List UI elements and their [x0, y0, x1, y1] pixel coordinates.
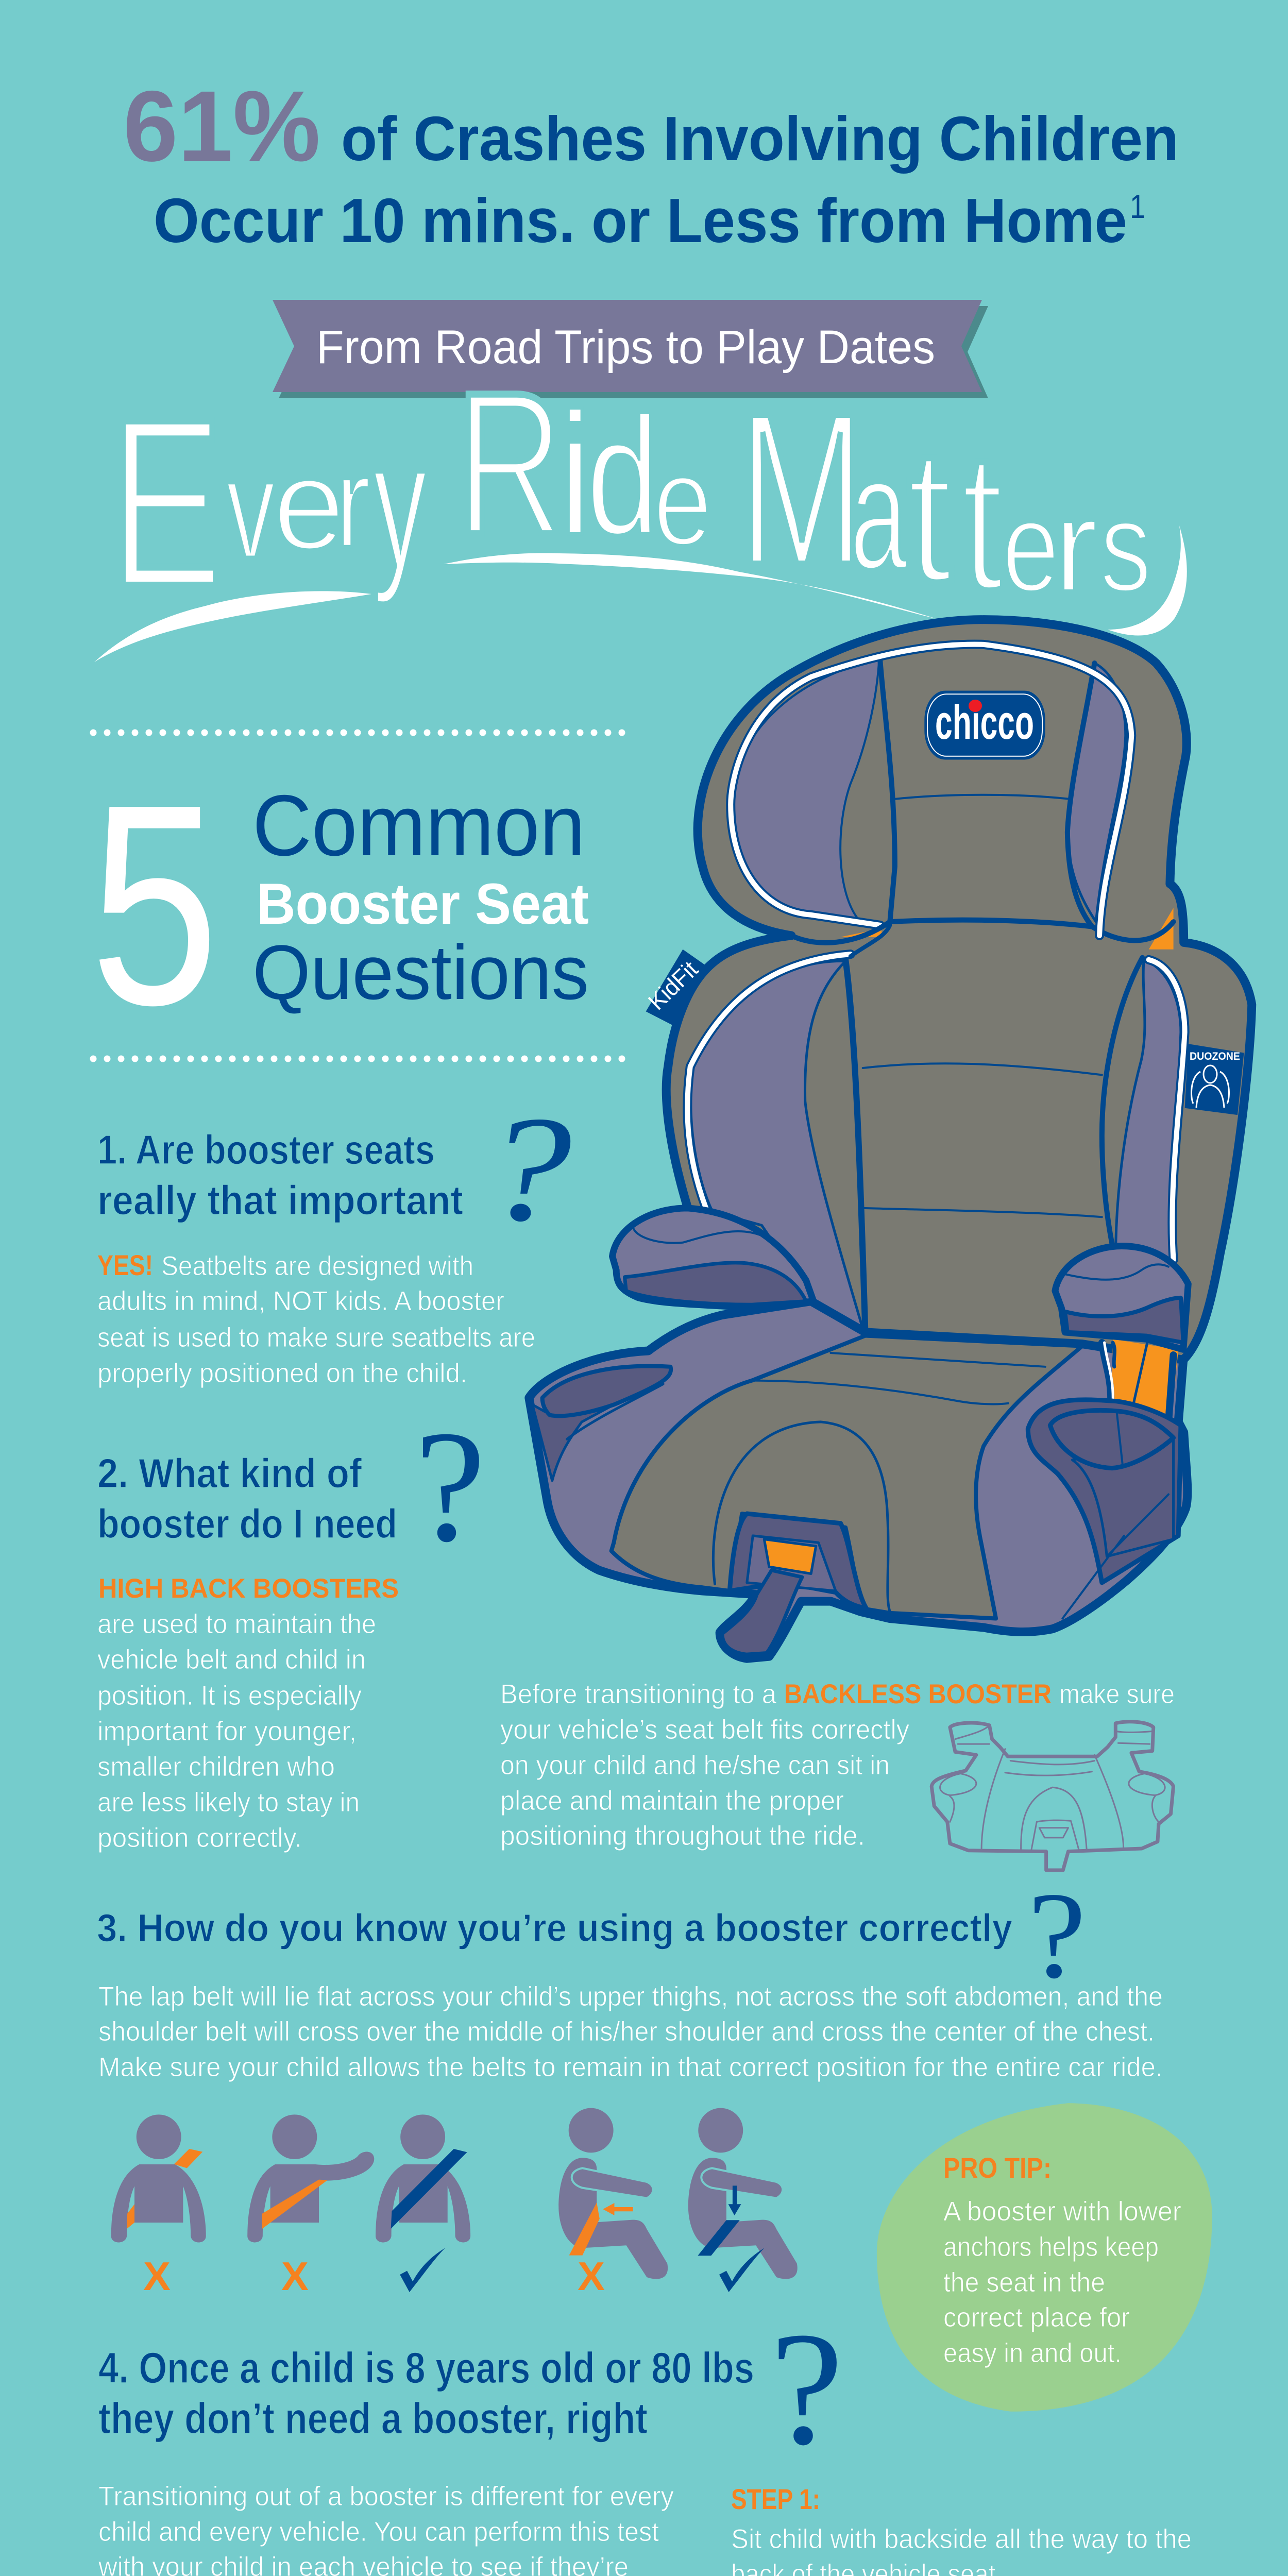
script title: Every Ride Matters: e — [273, 432, 345, 576]
icon: correct shoulder belt figure — [376, 2114, 470, 2292]
high back boosters text: are less likely to stay in — [97, 1787, 360, 1818]
question 4 heading: 4. Once a child is 8 years old or 80 lbs — [98, 2344, 754, 2392]
question 2 heading: booster do I need — [97, 1501, 397, 1547]
panel: pro tip lower anchors: PRO TIP: — [943, 2151, 1052, 2184]
question 4 heading: they don’t need a booster, right — [98, 2394, 648, 2443]
backless booster text: Before transitioning to a — [500, 1679, 776, 1709]
ribbon banner: From Road Trips to Play Dates — [316, 321, 935, 374]
question 1 answer — [97, 1249, 535, 1388]
backless booster text: make sure — [1059, 1679, 1175, 1709]
question 4 body — [98, 2481, 674, 2576]
question 1 heading — [97, 1127, 463, 1223]
title: 61% of crashes: 1 — [1130, 188, 1145, 225]
script title: Every Ride Matters: R — [456, 351, 564, 577]
swoosh under script title — [94, 526, 1187, 662]
panel: pro tip lower anchors — [877, 2103, 1212, 2412]
panel: pro tip lower anchors: A booster with lower — [943, 2196, 1181, 2227]
script title: Every Ride Matters: v — [226, 430, 275, 588]
icon: wrong shoulder belt figure — [111, 2114, 206, 2242]
mark: wrong: X — [281, 2253, 309, 2299]
question 1 answer: seat is used to make sure seatbelts are — [97, 1323, 535, 1353]
icon: backless booster outline — [931, 1722, 1174, 1870]
script title: Every Ride Matters: t — [907, 409, 953, 622]
icon: wrong lap belt side figure — [558, 2108, 668, 2279]
script title: Every Ride Matters: M — [738, 367, 865, 611]
backless booster text: positioning throughout the ride. — [500, 1821, 865, 1851]
script title: Every Ride Matters: d — [586, 382, 659, 569]
heading: 5 common booster seat questions: Questions — [252, 929, 589, 1015]
high back boosters text — [97, 1573, 399, 1853]
script title: Every Ride Matters: r — [1054, 472, 1098, 619]
question 3 body: shoulder belt will cross over the middle of his/her shoulder and cross the center of the chest. — [98, 2016, 1155, 2047]
backless booster text: your vehicle’s seat belt fits correctly — [500, 1715, 909, 1745]
illustration: booster seat — [529, 620, 1252, 1658]
high back boosters text: smaller children who — [97, 1752, 335, 1782]
script title: Every Ride Matters: s — [1100, 474, 1151, 618]
ribbon banner — [273, 300, 988, 398]
backless booster text: BACKLESS BOOSTER — [784, 1679, 1052, 1709]
backless booster text: place and maintain the proper — [500, 1786, 844, 1816]
mark: wrong: X — [143, 2253, 171, 2299]
DuoZone tag — [1190, 1050, 1240, 1108]
belt position icons — [111, 2108, 798, 2299]
question 2 heading: 2. What kind of — [97, 1450, 362, 1496]
dotted divider top — [93, 730, 626, 736]
panel: pro tip lower anchors: the seat in the — [943, 2267, 1105, 2298]
dotted divider — [93, 1055, 626, 1062]
question 1 answer: properly positioned on the child. — [97, 1358, 467, 1388]
question 3 body: Make sure your child allows the belts to remain in that correct position for the entire car ride. — [98, 2052, 1163, 2082]
question 4 heading — [98, 2344, 754, 2443]
question 3 heading: 3. How do you know you’re using a booster correctly — [97, 1906, 1012, 1950]
script title: Every Ride Matters: E — [109, 370, 223, 636]
logo dot — [969, 700, 982, 712]
question 1 answer: adults in mind, NOT kids. A booster — [97, 1286, 504, 1316]
mark: wrong: X — [578, 2253, 605, 2299]
panel: pro tip lower anchors: easy in and out. — [943, 2338, 1122, 2368]
question 1 heading: 1. Are booster seats — [97, 1127, 435, 1173]
step 1: Sit child with backside all the way to the — [731, 2524, 1192, 2554]
title: 61% of crashes: 61% — [123, 70, 320, 182]
icon: correct lap belt side figure — [688, 2108, 798, 2292]
heading: 5 common booster seat questions: Common — [252, 777, 585, 874]
script title: Every Ride Matters: r — [335, 430, 371, 574]
high back boosters text: important for younger, — [97, 1716, 357, 1747]
high back boosters text: vehicle belt and child in — [97, 1645, 366, 1675]
question 4 body: child and every vehicle. You can perform this test — [98, 2517, 659, 2547]
KidFit tag: KidFit — [643, 956, 703, 1015]
heading: 5 common booster seat questions: Booster Seat — [257, 872, 589, 936]
title: 61% of crashes: Occur 10 mins. or Less from Home — [154, 185, 1127, 256]
icon: question mark: ? — [770, 2298, 843, 2478]
icon: belt under arm figure — [247, 2114, 374, 2242]
script title: Every Ride Matters: a — [850, 425, 908, 603]
seat brand logo text: chicco — [935, 695, 1034, 749]
heading: 5 common booster seat questions — [90, 745, 589, 1064]
panel: pro tip lower anchors: correct place for — [943, 2302, 1130, 2333]
title: 61% of crashes — [123, 70, 1179, 256]
question 4 — [68, 2298, 1224, 2576]
question 1 — [97, 1085, 572, 1388]
question 2 — [97, 1398, 1175, 1870]
question 3 — [97, 1867, 1212, 2412]
script title: Every Ride Matters — [109, 351, 1151, 636]
question 3 body — [98, 1981, 1163, 2082]
high back boosters text: position. It is especially — [97, 1681, 362, 1711]
backless booster text — [500, 1679, 1175, 1851]
backless booster text: on your child and he/she can sit in — [500, 1750, 890, 1781]
script title: Every Ride Matters: e — [653, 431, 712, 571]
question 3 body: The lap belt will lie flat across your child’s upper thighs, not across the soft abdomen, and the — [98, 1981, 1163, 2012]
icon: question mark: ? — [484, 1085, 572, 1252]
question 4 body: Transitioning out of a booster is different for every — [98, 2481, 674, 2512]
icon: question mark: ? — [1028, 1867, 1086, 2004]
panel: pro tip lower anchors: anchors helps keep — [943, 2232, 1159, 2262]
high back boosters text: are used to maintain the — [97, 1609, 376, 1639]
script title: Every Ride Matters: i — [558, 377, 592, 571]
icon: question mark: ? — [415, 1398, 486, 1575]
step 1 — [731, 2483, 1192, 2576]
script title: Every Ride Matters: y — [374, 405, 427, 605]
question 2 heading — [97, 1450, 397, 1547]
script title: Every Ride Matters: e — [1002, 474, 1059, 618]
title: 61% of crashes: of Crashes Involving Children — [341, 104, 1179, 174]
script title: Every Ride Matters: t — [961, 411, 1004, 631]
question 1 answer: Seatbelts are designed with — [161, 1251, 473, 1281]
question 1 heading: really that important — [97, 1177, 463, 1223]
question 1 answer: YES! — [97, 1249, 153, 1281]
step 1: STEP 1: — [731, 2483, 820, 2515]
DuoZone tag: DUOZONE — [1190, 1050, 1240, 1062]
heading: 5 common booster seat questions: 5 — [90, 745, 219, 1064]
high back boosters text: position correctly. — [97, 1823, 302, 1853]
high back boosters text: HIGH BACK BOOSTERS — [98, 1573, 399, 1604]
